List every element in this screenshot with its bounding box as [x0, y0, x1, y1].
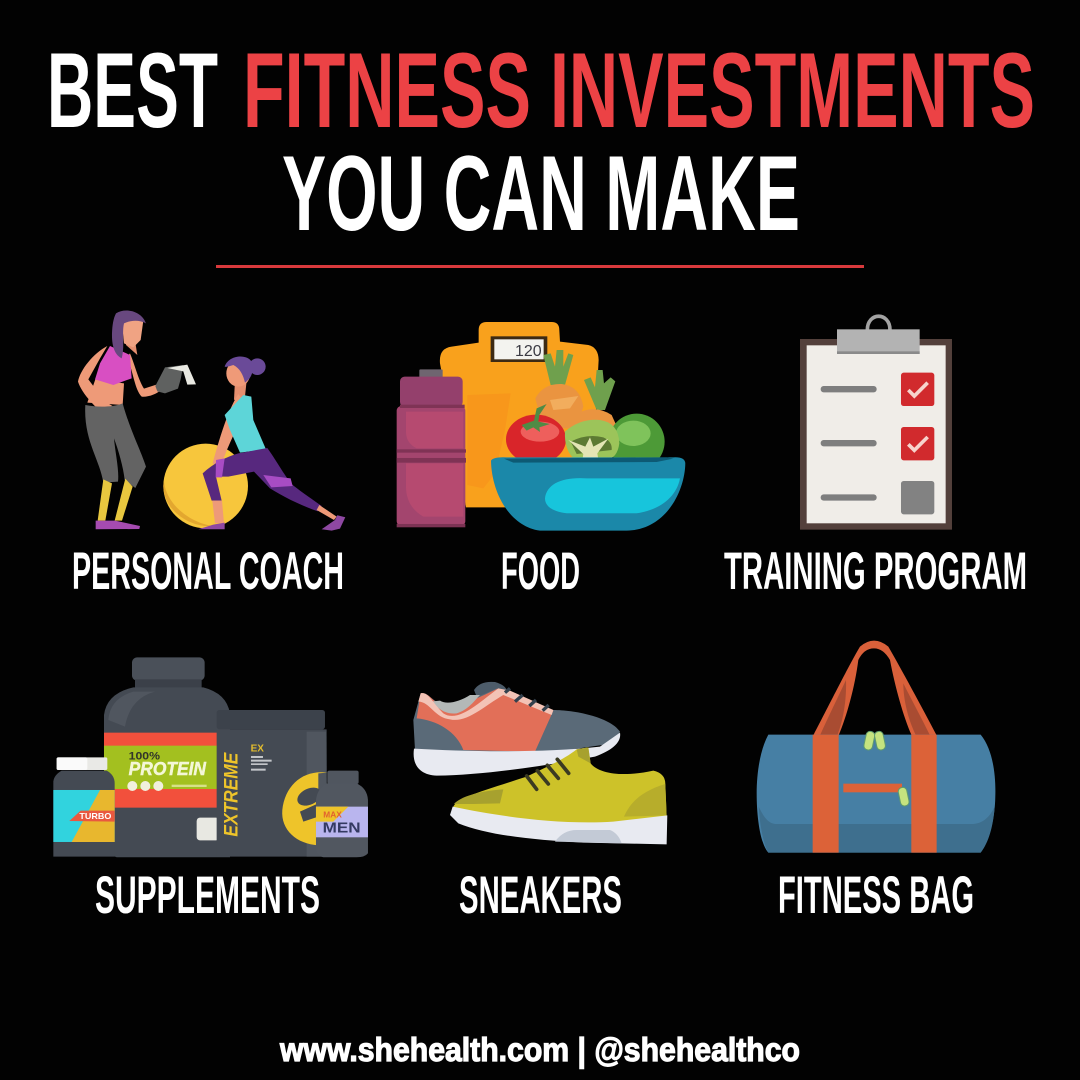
- label: sneakers: SNEAKERS: [459, 866, 622, 925]
- water bottle: [397, 369, 466, 527]
- icon: coach and client: [78, 310, 345, 531]
- protein tub: 100%: [129, 751, 160, 763]
- bag handle: [813, 641, 937, 735]
- protein tub: [104, 657, 230, 857]
- tomato: [506, 404, 566, 464]
- orange sneaker: [413, 682, 620, 776]
- icon: duffel bag: [757, 641, 995, 853]
- panel: sneakers: [413, 682, 667, 925]
- panel: training program: [724, 316, 1027, 601]
- panel: supplements: [53, 657, 368, 925]
- protein tub: PROTEIN: [129, 758, 206, 779]
- extreme tub: EXTREME: [221, 752, 242, 837]
- bag base shadow: [759, 807, 995, 853]
- turbo bottle: [53, 757, 115, 857]
- broccoli: [565, 420, 619, 465]
- max men bottle: [316, 771, 368, 857]
- checklist row 2: [821, 427, 934, 460]
- max men bottle: MAX: [323, 809, 342, 819]
- exercise ball: [163, 444, 248, 528]
- bag straps: [813, 735, 937, 853]
- panel: personal coach: [72, 310, 345, 601]
- icon: supplement containers: [53, 657, 368, 857]
- icon: pair of sneakers: [413, 682, 667, 844]
- checklist row 1: [821, 373, 934, 406]
- title: BEST: [47, 30, 218, 150]
- bag body: [757, 735, 995, 853]
- bowl: [491, 457, 685, 531]
- zipper pulls: [863, 731, 910, 807]
- icon: scale, bottle and food bowl: [397, 322, 685, 531]
- extreme tub: EX: [251, 743, 264, 754]
- footer credit: www.shehealth.com | @shehealthco: [279, 1031, 800, 1068]
- icon: clipboard checklist: [800, 316, 952, 530]
- extreme tub: [217, 710, 327, 857]
- lime: [609, 414, 665, 470]
- label: food: FOOD: [501, 542, 580, 601]
- clipboard board: [800, 339, 952, 530]
- checklist row 3: [821, 481, 934, 514]
- carrots: [535, 350, 617, 432]
- pocket zip: [843, 784, 902, 792]
- clipboard clip: [837, 316, 920, 354]
- bathroom scale: 120: [515, 343, 542, 360]
- bathroom scale: [440, 322, 599, 507]
- clipboard paper: [807, 345, 946, 523]
- panel: food: [397, 322, 685, 601]
- max men bottle: MEN: [323, 821, 361, 837]
- label: personal coach: PERSONAL COACH: [72, 542, 344, 601]
- title: [47, 30, 1035, 253]
- yellow sneaker: [450, 747, 667, 844]
- panel: fitness bag: [757, 641, 995, 925]
- turbo bottle: TURBO: [79, 811, 112, 821]
- divider line: [216, 265, 864, 268]
- label: supplements: SUPPLEMENTS: [95, 866, 320, 925]
- coach figure: [78, 310, 196, 529]
- client figure: [198, 356, 345, 531]
